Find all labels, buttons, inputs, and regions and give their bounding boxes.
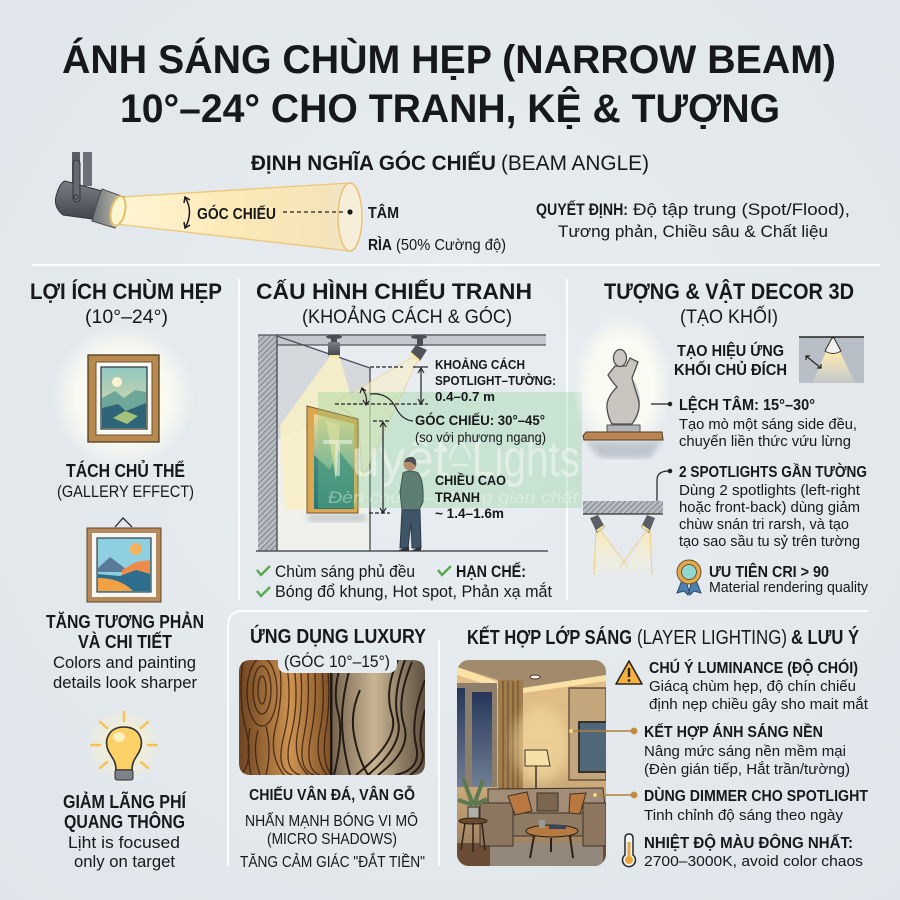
- heading: configuration: (KHOẢNG CÁCH & GÓC): [302, 306, 512, 328]
- text: luminance note: Giácą chùm hẹp, độ chín chiếu: [649, 678, 856, 695]
- text: reduce waste: Lịht is focused: [68, 834, 180, 852]
- text: color temperature: [644, 834, 863, 870]
- dividers: [32, 265, 880, 866]
- text: decisions: QUYẾT ĐỊNH:: [536, 200, 628, 219]
- panel: luxury applications: [239, 624, 427, 871]
- text: angle: (so với phương ngang): [415, 430, 546, 445]
- text: off-center: Tạo mò một sáng side đều,: [679, 416, 857, 433]
- text: CRI priority: Material rendering quality: [709, 580, 869, 596]
- text: luminance note: [649, 659, 869, 713]
- text: ambient light: Nâng mức sáng nền mềm mại: [644, 743, 846, 760]
- panel: layer lighting: [457, 625, 869, 870]
- icon: light bulb: [86, 707, 162, 783]
- watermark panel: Lights: [472, 430, 580, 488]
- text: contrast: TĂNG TƯƠNG PHẢN: [46, 611, 204, 632]
- heading: statues: [604, 279, 854, 328]
- text: reduce waste: QUANG THÔNG: [64, 811, 185, 832]
- leader: ambient light: [569, 728, 637, 734]
- text: stone and wood grain: CHIẾU VÂN ĐÁ, VÂN GỖ: [249, 785, 415, 804]
- text: stone and wood grain: (MICRO SHADOWS): [267, 831, 397, 848]
- panel: statues and 3D decor: [572, 279, 869, 596]
- text: decisions: Độ tập trung (Spot/Flood),: [633, 200, 850, 219]
- heading: layer lighting: KẾT HỢP LỚP SÁNG: [467, 625, 632, 649]
- icon: right spotlight: [410, 335, 427, 361]
- diagram: wall section: [256, 334, 548, 551]
- panel: benefits column: [30, 279, 222, 871]
- icon: spotlight fixture: [55, 152, 128, 228]
- text: reduce waste: [63, 791, 187, 871]
- heading: layer lighting: & LƯU Ý: [791, 625, 860, 649]
- text: painting height: CHIỀU CAO: [435, 473, 506, 488]
- text: two spotlights: Dùng 2 spotlights (left-right: [679, 482, 861, 499]
- label: beam angle: GÓC CHIẾU: [197, 205, 276, 223]
- heading: luxury: (GÓC 10°–15°): [284, 652, 390, 671]
- text: ambient light: KẾT HỢP ÁNH SÁNG NỀN: [644, 724, 823, 741]
- label: edge: RÌA: [368, 237, 392, 254]
- text: two spotlights: 2 SPOTLIGHTS GẦN TƯỜNG: [679, 462, 867, 481]
- angle arc: [184, 197, 190, 228]
- heading: statues: TƯỢNG & VẬT DECOR 3D: [604, 279, 854, 304]
- heading: beam angle: ĐỊNH NGHĨA GÓC CHIẾU: [251, 151, 496, 175]
- center axis: [283, 209, 353, 215]
- title: 10°–24° CHO TRANH, KỆ & TƯỢNG: [120, 85, 780, 131]
- text: off-center: [679, 395, 857, 450]
- text: painting height: ~ 1.4–1.6m: [435, 506, 504, 521]
- light cone: right spotlight: [335, 358, 418, 477]
- text: luminance note: CHÚ Ý LUMINANCE (ĐỘ CHÓI): [649, 659, 858, 677]
- heading: benefits: (10°–24°): [85, 307, 168, 328]
- watermark panel: [318, 392, 582, 508]
- title: ÁNH SÁNG CHÙM HẸP (NARROW BEAM): [62, 36, 836, 82]
- text: angle: [415, 413, 546, 445]
- heading: luxury: [250, 624, 427, 671]
- icon: gallery frame: [51, 325, 195, 469]
- text: contrast: [46, 611, 204, 692]
- dimension lines: [335, 367, 428, 513]
- text: separate subject: [57, 460, 194, 501]
- image: wood and stone textures: [239, 658, 425, 775]
- text: off-center: LỆCH TÂM: 15°–30°: [679, 395, 815, 414]
- text: spotlight distance: KHOẢNG CÁCH: [435, 357, 525, 372]
- text: dimmer: Tinh chỉnh độ sáng theo ngày: [644, 807, 843, 824]
- text: decisions: Tương phản, Chiều sâu & Chất liệu: [558, 222, 828, 241]
- checklist: HẠN CHẾ:: [456, 562, 526, 581]
- text: ambient light: (Đèn gián tiếp, Hắt trần/tường): [644, 761, 850, 778]
- text: intentional volume: KHỐI CHỦ ĐÍCH: [674, 359, 787, 379]
- heading: beam angle: [251, 151, 649, 175]
- text: contrast: Colors and painting: [53, 654, 196, 672]
- checklist: [257, 562, 552, 601]
- icon: cone inset: [799, 337, 864, 383]
- text: painting height: TRANH: [435, 490, 480, 505]
- title: [62, 36, 836, 131]
- text: stone and wood grain: [240, 785, 425, 871]
- text: reduce waste: GIẢM LÃNG PHÍ: [63, 791, 187, 812]
- heading: layer lighting: [467, 625, 860, 649]
- text: separate subject: TÁCH CHỦ THỂ: [66, 460, 185, 481]
- text: contrast: VÀ CHI TIẾT: [78, 631, 172, 652]
- text: color temperature: 2700–3000K, avoid color chaos: [644, 853, 863, 870]
- light cone: left spotlight: [280, 358, 358, 510]
- text: spotlight distance: 0.4–0.7 m: [435, 389, 495, 404]
- watermark panel: Đèn chùm – không gian chất: [328, 488, 579, 507]
- light beam: [116, 183, 362, 251]
- heading: configuration: CẤU HÌNH CHIẾU TRANH: [256, 279, 532, 304]
- heading: configuration: [256, 279, 532, 328]
- text: ambient light: [644, 724, 850, 778]
- text: intentional volume: [674, 341, 787, 379]
- icon: rosette: [677, 560, 701, 595]
- panel: beam angle definition: [55, 151, 850, 254]
- heading: layer lighting: (LAYER LIGHTING): [637, 627, 787, 649]
- text: color temperature: NHIỆT ĐỘ MÀU ĐÔNG NHẤT:: [644, 834, 853, 852]
- icon: contrast frame: [87, 518, 161, 602]
- icon: warning triangle: [616, 661, 642, 684]
- heading: luxury: ỨNG DỤNG LUXURY: [250, 624, 427, 648]
- heading: beam angle: (BEAM ANGLE): [501, 152, 649, 175]
- text: spotlight distance: [435, 357, 556, 404]
- text: contrast: details look sharper: [53, 674, 198, 692]
- text: angle: GÓC CHIẾU: 30°–45°: [415, 413, 545, 428]
- icon: left spotlight: [326, 335, 342, 358]
- text: spotlight distance: SPOTLIGHT–TƯỜNG:: [435, 373, 556, 388]
- text: stone and wood grain: NHẤN MẠNH BÓNG VI MÔ: [245, 813, 418, 830]
- text: two spotlights: [679, 462, 867, 550]
- text: stone and wood grain: TĂNG CẢM GIÁC "ĐẮT TIỀN": [240, 853, 425, 871]
- heading: benefits: LỢI ÍCH CHÙM HẸP: [30, 279, 222, 304]
- text: reduce waste: only on target: [74, 853, 175, 871]
- watermark panel: Tuyết: [322, 430, 449, 488]
- text: two spotlights: tạo sao sầu tu sỷ trên tường: [679, 533, 860, 550]
- person: [397, 457, 423, 551]
- label: center: TÂM: [368, 204, 399, 222]
- leader: off-center: [651, 402, 672, 406]
- text: two spotlights: chùw snán tri rarsh, và tạo: [679, 516, 849, 533]
- text: painting height: [435, 473, 506, 521]
- leader: dimmer: [593, 792, 637, 798]
- heading: statues: (TẠO KHỐI): [680, 306, 778, 328]
- text: dimmer: [644, 787, 868, 824]
- icon: statue on shelf: [572, 313, 672, 458]
- text: two spotlights: hoặc front-back) dùng giảm: [679, 499, 860, 516]
- text: luminance note: định nẹp chiều gây sho mait mắt: [649, 696, 869, 713]
- text: off-center: chuyến liền thức vứu lừng: [679, 433, 851, 450]
- checklist: Chùm sáng phủ đều: [275, 562, 415, 581]
- painting: [307, 406, 366, 522]
- heading: benefits: [30, 279, 222, 328]
- text: dimmer: DÙNG DIMMER CHO SPOTLIGHT: [644, 787, 868, 805]
- checklist: Bóng đổ khung, Hot spot, Phản xạ mắt: [275, 582, 552, 601]
- text: CRI priority: [709, 562, 869, 596]
- icon: two spotlights near wall: [583, 469, 672, 575]
- image: living room: [457, 660, 609, 866]
- text: decisions: [536, 200, 850, 241]
- text: intentional volume: TẠO HIỆU ỨNG: [677, 341, 784, 360]
- label: edge: (50% Cường độ): [396, 237, 506, 254]
- text: separate subject: (GALLERY EFFECT): [57, 482, 194, 501]
- panel: painting configuration: [256, 279, 582, 601]
- icon: thermometer: [622, 834, 636, 867]
- text: CRI priority: ƯU TIÊN CRI > 90: [709, 562, 829, 581]
